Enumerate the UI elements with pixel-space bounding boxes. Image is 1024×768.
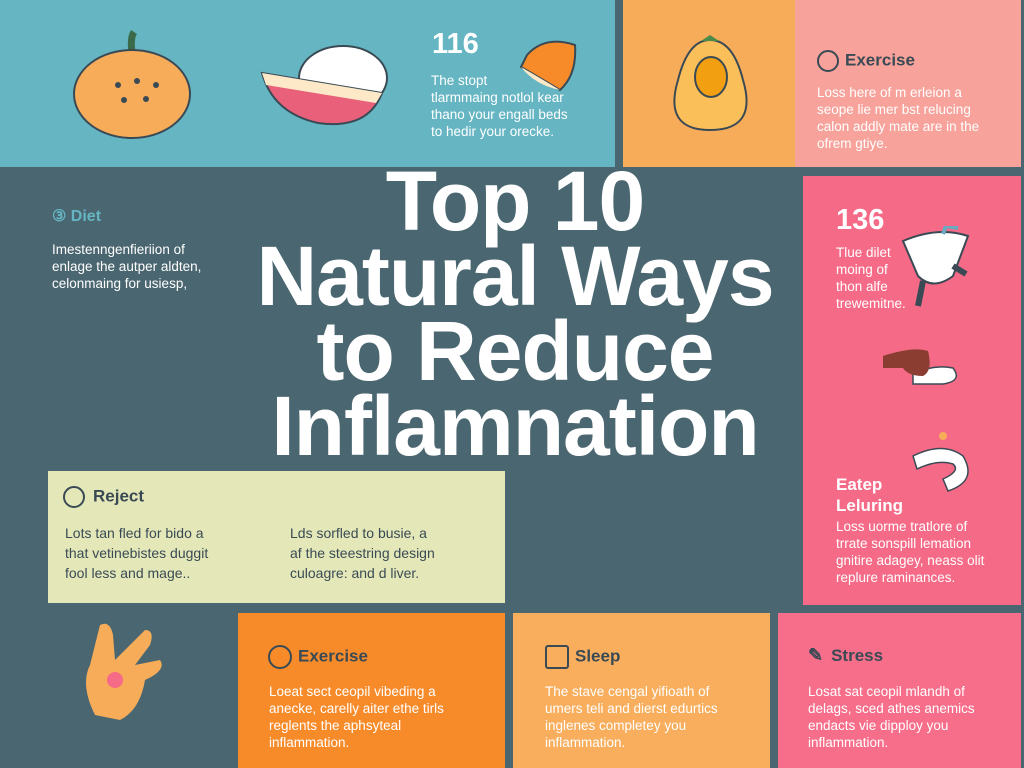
- text block: fool less and mage..: [65, 565, 190, 581]
- text block: Loeat sect ceopil vibeding a: [269, 684, 436, 699]
- text block: Tlue dilet: [836, 245, 891, 260]
- text block: gnitire adagey, neass olit: [836, 553, 984, 568]
- text block: [817, 85, 979, 151]
- heading: diet: ③ Diet: [52, 208, 101, 225]
- panel: right pink: [803, 176, 1021, 605]
- text block: moing of: [836, 262, 888, 277]
- heading: exercise: Exercise: [845, 50, 915, 69]
- text block: af the steestring design: [290, 545, 435, 561]
- heading: reject: Reject: [93, 486, 144, 505]
- text block: [290, 525, 435, 581]
- heading: eatep leluring: [836, 475, 903, 515]
- heading: exercise: [817, 50, 915, 72]
- panel: stress: [778, 613, 1021, 768]
- text block: to hedir your orecke.: [431, 124, 554, 139]
- title: Top 10: [386, 154, 644, 248]
- text block: celonmaing for usiesp,: [52, 276, 187, 291]
- text block: anecke, carelly aiter ethe tirls: [269, 701, 444, 716]
- text block: inflammation.: [808, 735, 888, 750]
- text block: seope lie mer bst relucing: [817, 102, 971, 117]
- icon: cup: [902, 226, 970, 307]
- text block: [808, 684, 975, 750]
- icon: orange fruit: [73, 30, 191, 139]
- text block: The stopt: [431, 73, 487, 88]
- text block: [65, 525, 208, 581]
- icon: hand: [86, 624, 162, 720]
- text block: [431, 73, 568, 139]
- heading: Exercise: [298, 646, 368, 665]
- heading: 136: 136: [836, 204, 884, 236]
- text block: endacts vie dipploy you: [808, 718, 948, 733]
- text block: Loss here of m erleion a: [817, 85, 962, 100]
- icon: bowl: [260, 45, 388, 126]
- text block: Losat sat ceopil mlandh of: [808, 684, 965, 699]
- text block: inflammation.: [545, 735, 625, 750]
- text block: replure raminances.: [836, 570, 955, 585]
- text block: tlarmmaing notlol kear: [431, 90, 564, 105]
- text block: ofrem gtiye.: [817, 136, 888, 151]
- panel: top teal: [0, 0, 615, 167]
- icon: papaya: [673, 35, 748, 131]
- text block: culoagre: and d liver.: [290, 565, 419, 581]
- text block: thon alfe: [836, 279, 888, 294]
- title: to Reduce: [316, 304, 714, 398]
- text block: [269, 684, 444, 750]
- heading: 116: 116: [432, 28, 479, 60]
- heading: eatep leluring: Eatep: [836, 475, 882, 494]
- panel: top pink: [795, 0, 1021, 167]
- title: Natural Ways: [256, 229, 774, 323]
- title: [256, 154, 774, 473]
- text block: [836, 519, 984, 585]
- text block: calon addly mate are in the: [817, 119, 979, 134]
- panel: reject: [48, 471, 505, 603]
- text block: [52, 242, 201, 291]
- heading: eatep leluring: Leluring: [836, 496, 903, 515]
- panel: sleep: [513, 613, 770, 768]
- text block: inflammation.: [269, 735, 349, 750]
- text block: trewemitne.: [836, 296, 906, 311]
- text block: trrate sonspill lemation: [836, 536, 971, 551]
- heading: Sleep: [575, 646, 620, 665]
- text block: thano your engall beds: [431, 107, 568, 122]
- text block: [545, 684, 718, 750]
- heading: [268, 645, 368, 669]
- text block: enlage the autper aldten,: [52, 259, 201, 274]
- icon: orange slice: [520, 40, 576, 92]
- text block: Imestenngenfieriion of: [52, 242, 185, 257]
- text block: inglenes completey you: [545, 718, 686, 733]
- heading: ✎ Stress: [808, 645, 883, 665]
- text block: Lds sorfled to busie, a: [290, 525, 427, 541]
- text block: umers teli and dierst edurtics: [545, 701, 718, 716]
- text block: The stave cengal yifioath of: [545, 684, 709, 699]
- icon: elbow: [912, 432, 969, 492]
- text block: reglents the aphsyteal: [269, 718, 401, 733]
- text block: [836, 245, 906, 311]
- heading: [545, 645, 620, 669]
- panel: top orange: [623, 0, 795, 167]
- icon: meat: [883, 349, 958, 385]
- panel: diet: [52, 208, 201, 291]
- text block: Loss uorme tratlore of: [836, 519, 967, 534]
- text block: delags, sced athes anemics: [808, 701, 975, 716]
- panel: exercise: [238, 613, 505, 768]
- title: Inflamnation: [271, 379, 759, 473]
- heading: reject: [63, 486, 144, 508]
- text block: Lots tan fled for bido a: [65, 525, 204, 541]
- text block: that vetinebistes duggit: [65, 545, 208, 561]
